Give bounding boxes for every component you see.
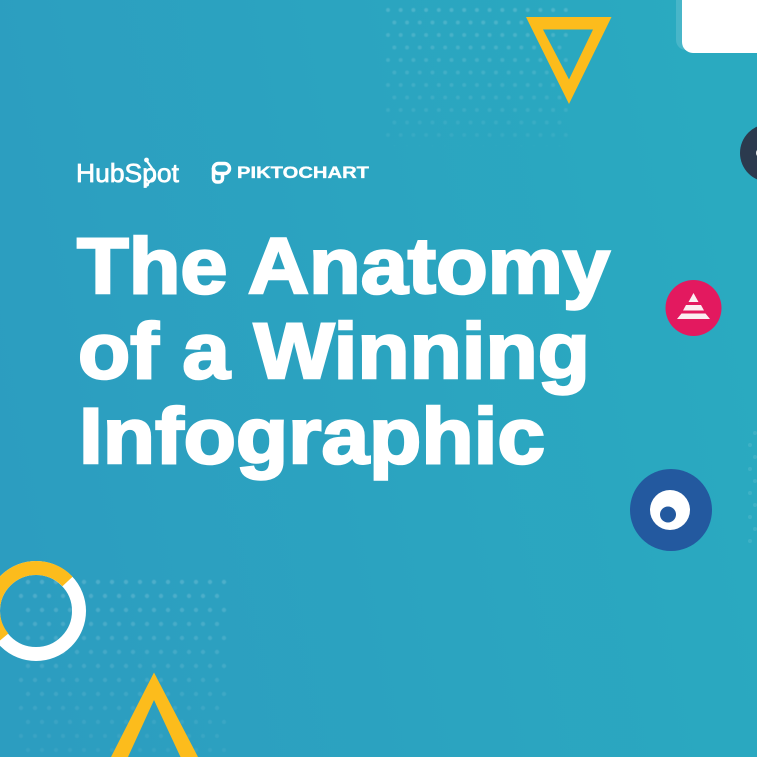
title: of a Winning xyxy=(78,306,590,395)
icon: HubSpot sprocket xyxy=(144,158,154,186)
title: The Anatomy xyxy=(77,221,610,310)
dot pattern: top xyxy=(384,6,568,146)
icon: Piktochart mark xyxy=(214,164,230,182)
Piktochart logo xyxy=(214,164,369,182)
yellow triangle, bottom xyxy=(111,672,198,757)
white card, top right xyxy=(676,0,757,53)
yellow triangle, top xyxy=(526,17,612,104)
icon: pink pyramid badge xyxy=(666,280,722,336)
dot pattern: right edge xyxy=(748,431,757,543)
HubSpot logo: HubSpot xyxy=(76,158,180,188)
title xyxy=(77,221,610,480)
icon: blue target circle xyxy=(630,469,712,551)
donut ring, bottom left xyxy=(0,568,79,654)
Piktochart logo: PIKTOCHART xyxy=(237,164,369,182)
dark circle, right edge xyxy=(740,124,757,182)
title: Infographic xyxy=(79,391,545,480)
dot pattern: bottom left xyxy=(17,578,228,757)
